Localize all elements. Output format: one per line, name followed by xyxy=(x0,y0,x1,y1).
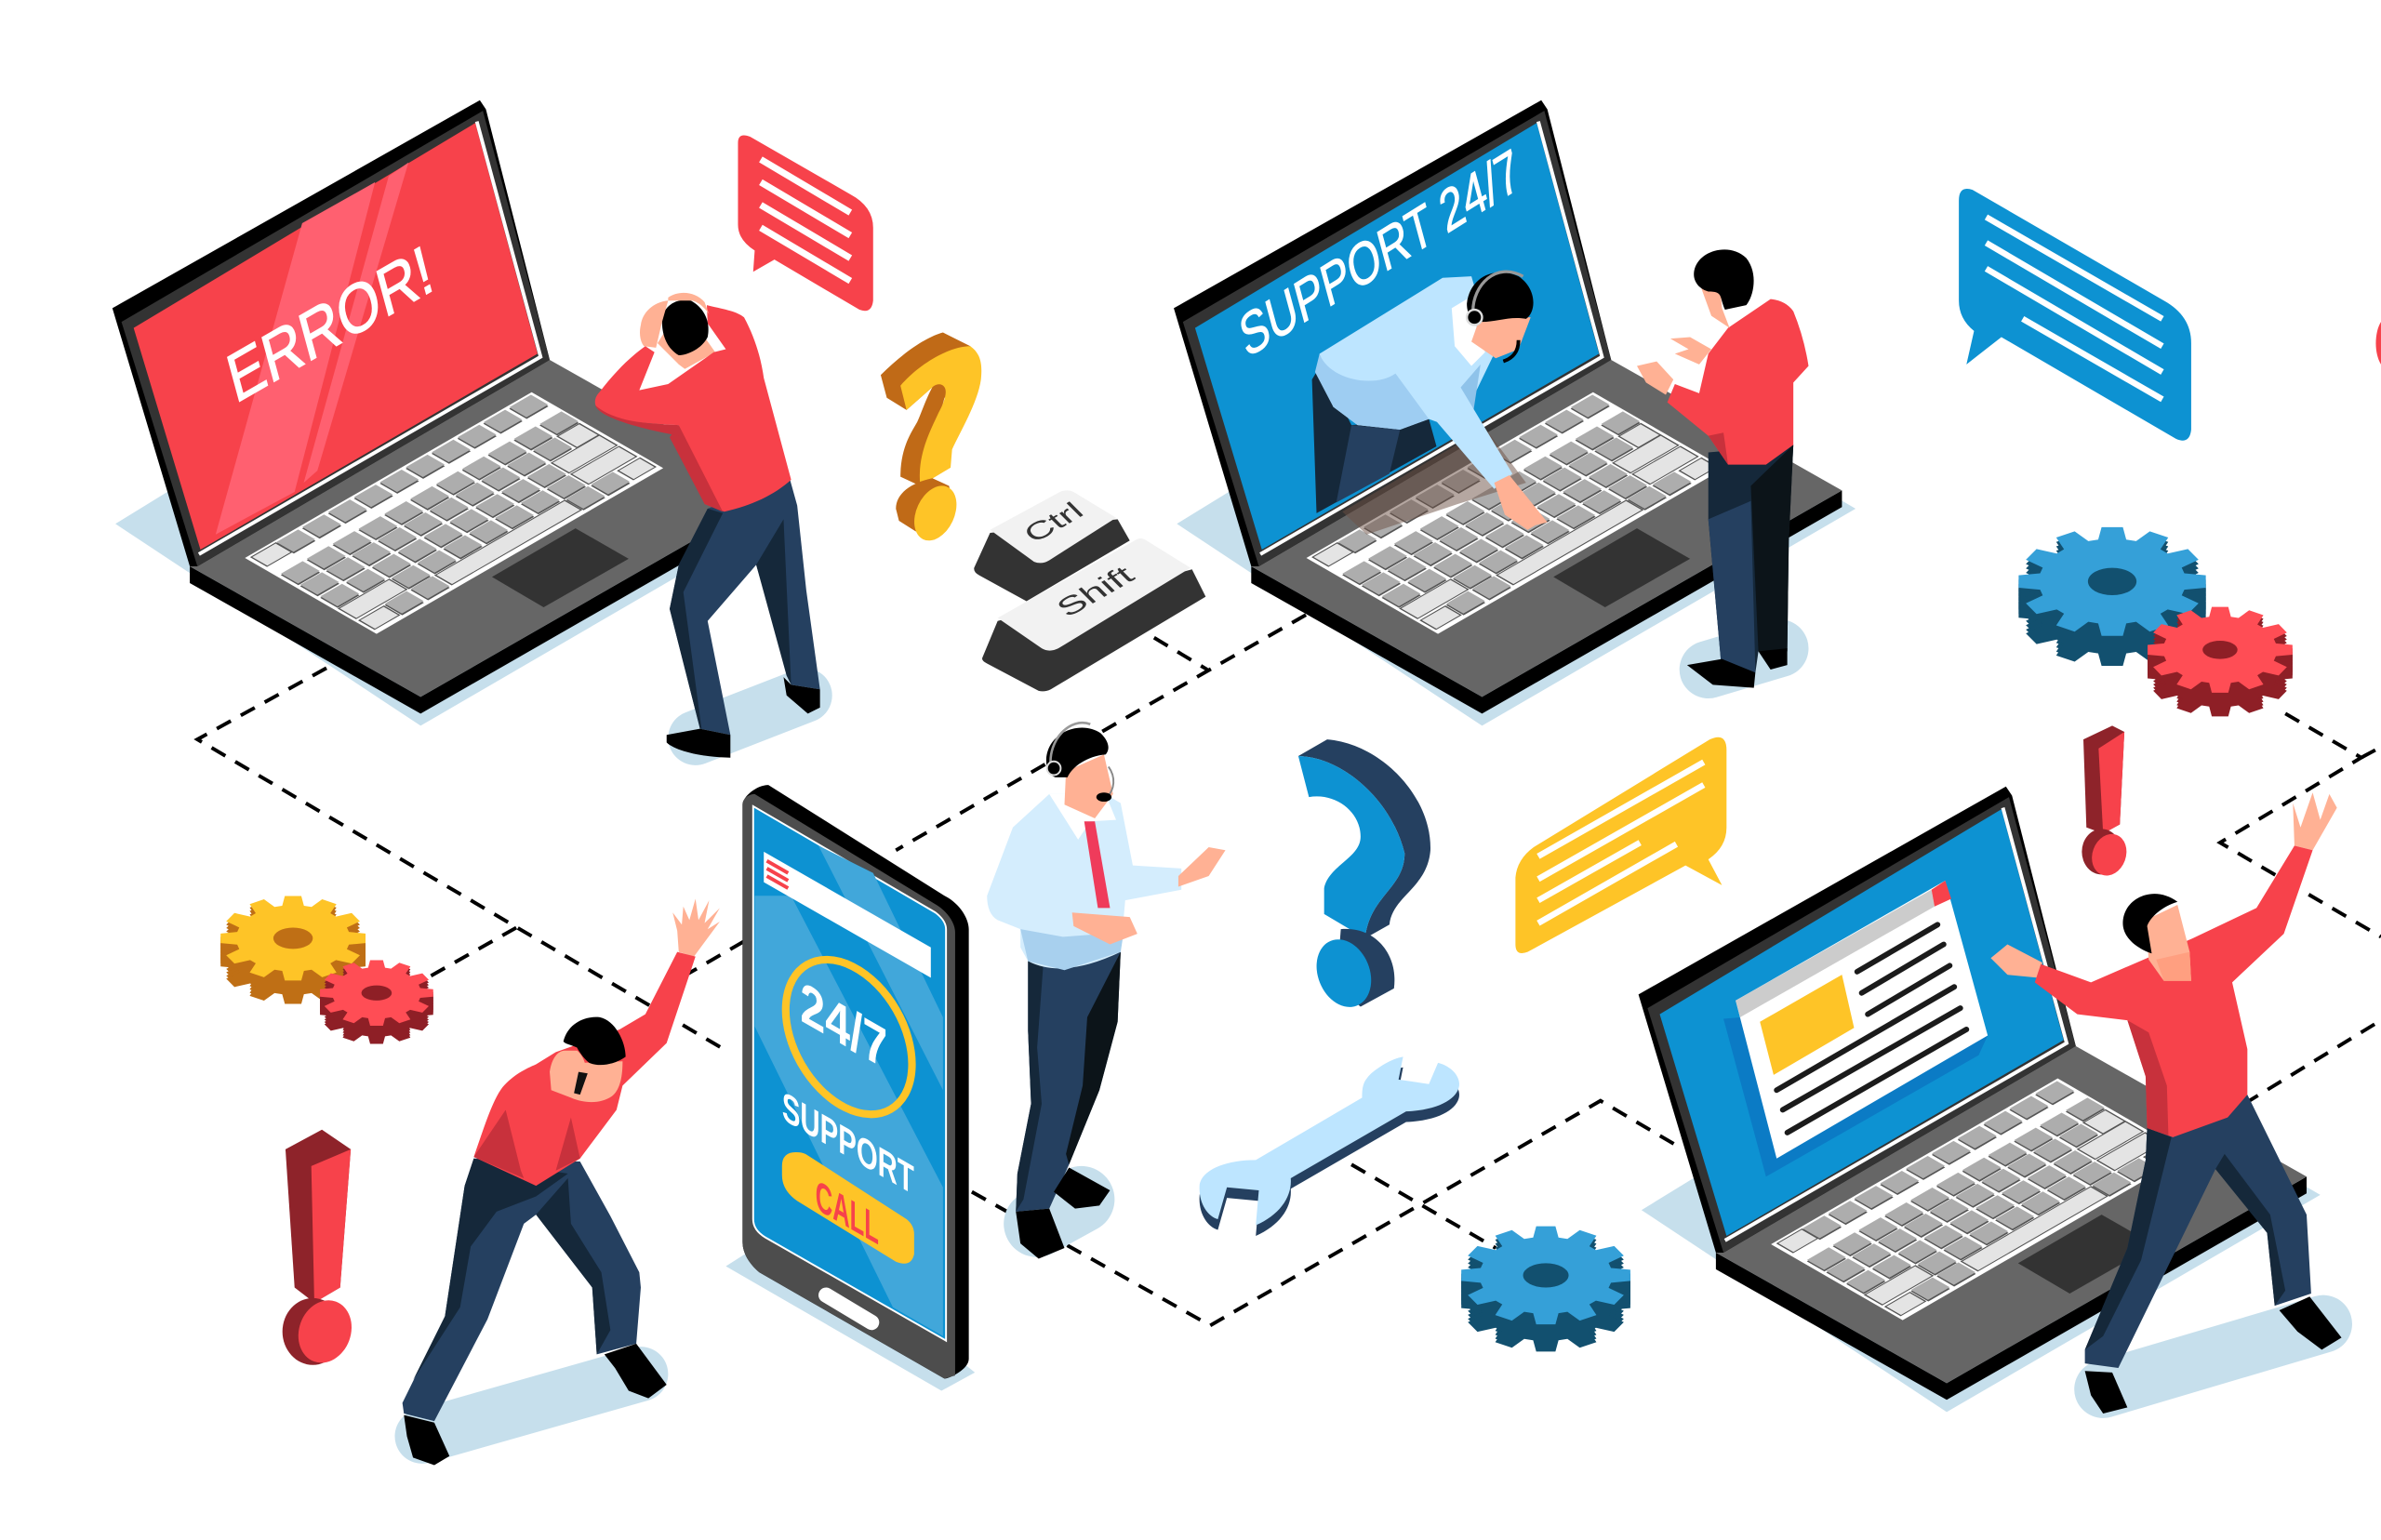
trousers xyxy=(1016,952,1121,1212)
phone xyxy=(574,1072,588,1095)
blue gear xyxy=(2018,532,2206,666)
tie xyxy=(1084,821,1110,908)
exclamation mark: top right xyxy=(2082,725,2132,881)
dashed connector lines xyxy=(197,615,2381,1325)
exclamation mark: bottom left xyxy=(283,1130,360,1371)
hair xyxy=(1694,249,1754,310)
screen edge highlight xyxy=(1260,122,1602,554)
agent arm xyxy=(1395,308,1512,489)
agent trousers xyxy=(1312,365,1436,513)
keyboard key: Shift: Shift xyxy=(1050,561,1140,622)
person: support customer, back view xyxy=(1637,249,1808,688)
hair xyxy=(2122,894,2177,953)
error text: ERROR! xyxy=(219,232,440,418)
face and neck xyxy=(1699,283,1730,328)
trousers xyxy=(2085,1095,2311,1368)
hands xyxy=(1670,337,1711,365)
agent hair xyxy=(1467,272,1534,322)
smartphone with support app xyxy=(725,785,975,1391)
call text: CALL xyxy=(816,1171,879,1255)
ring text: 24/7 xyxy=(800,969,887,1083)
call button xyxy=(782,1152,914,1264)
phone body xyxy=(742,785,969,1378)
agent face xyxy=(1471,316,1531,358)
browser image xyxy=(1760,975,1854,1075)
browser title bar xyxy=(1736,890,1935,1017)
agent headset xyxy=(1473,272,1523,312)
speech bubble: yellow xyxy=(1515,737,1726,953)
shirt xyxy=(987,794,1181,968)
sweater xyxy=(1668,299,1808,465)
screen reflections xyxy=(216,163,408,535)
hands xyxy=(1990,945,2042,977)
screen stripes xyxy=(754,845,943,1336)
yellow ring xyxy=(760,937,938,1136)
speech bubble: blue xyxy=(1959,189,2191,441)
neck and face xyxy=(2146,905,2191,981)
browser window xyxy=(1736,881,1988,1159)
question mark dot xyxy=(1337,929,1394,1006)
trousers xyxy=(1709,445,1793,672)
phone screen xyxy=(753,806,946,1341)
agent collar xyxy=(1452,299,1485,365)
hair xyxy=(564,1017,626,1065)
yellow gear xyxy=(220,899,366,1004)
hair xyxy=(662,300,709,355)
shoes xyxy=(2085,1371,2127,1414)
keyboard key: Shift xyxy=(982,538,1205,691)
laptop: error screen xyxy=(113,100,794,725)
agent shadow on keyboard xyxy=(1342,428,1526,535)
gear: blue large with red small xyxy=(2018,527,2293,716)
browser close button xyxy=(1932,881,1951,907)
person: red sweater worried, hands on head xyxy=(595,293,820,758)
speech bubble: red xyxy=(738,135,873,311)
collar xyxy=(1049,794,1116,840)
face xyxy=(571,1061,622,1102)
browser window shadow xyxy=(1723,1017,1988,1176)
sweater shading xyxy=(473,1109,524,1178)
floor shadow xyxy=(696,696,805,737)
shoes xyxy=(404,1415,449,1466)
question mark: blue xyxy=(1298,739,1430,1016)
sweater shading xyxy=(670,425,723,511)
shoes xyxy=(1016,1209,1064,1258)
face xyxy=(1064,754,1113,818)
floor shadow xyxy=(422,1374,641,1436)
trousers xyxy=(403,1159,641,1421)
hair xyxy=(1046,728,1109,777)
gears: yellow and red xyxy=(220,896,433,1043)
hand at ear xyxy=(550,1051,586,1097)
agent hand xyxy=(1495,475,1548,530)
floor shadow xyxy=(1709,648,1779,670)
hands xyxy=(640,300,668,348)
question mark dot xyxy=(896,478,953,531)
hands xyxy=(1178,847,1226,886)
person: support agent standing with headset xyxy=(987,723,1226,1258)
keyboard key: Ctrl xyxy=(974,490,1130,602)
shoes xyxy=(667,729,730,758)
neck and face xyxy=(658,326,715,369)
browser text lines xyxy=(1776,924,1966,1133)
sweater xyxy=(2035,845,2313,1137)
phone face xyxy=(742,794,955,1378)
laptop: support screen xyxy=(1174,100,1856,725)
person: red sweater bracing, raised arm xyxy=(403,899,720,1466)
screen edge highlight xyxy=(1725,808,2067,1241)
laptop: web page screen xyxy=(1639,787,2321,1412)
keyboard key: Ctrl: Ctrl xyxy=(1017,497,1090,548)
gear: blue bottom xyxy=(1461,1227,1630,1351)
floor shadow xyxy=(1037,1200,1081,1224)
question mark: orange xyxy=(881,333,981,548)
floor shadow xyxy=(2103,1324,2323,1389)
agent shirt xyxy=(1320,276,1495,432)
search bar xyxy=(764,852,931,977)
phone shadow xyxy=(725,1245,975,1391)
home button xyxy=(826,1295,871,1322)
sweater xyxy=(595,305,791,511)
red gear xyxy=(2148,610,2293,716)
error screen xyxy=(134,123,538,550)
support text: SUPPORT xyxy=(782,1082,914,1204)
small red gear xyxy=(320,962,433,1043)
blue screen xyxy=(1659,809,2064,1236)
support screen xyxy=(1195,123,1599,550)
menu icon xyxy=(766,861,788,888)
partial icon at right edge xyxy=(2375,322,2381,365)
sweater xyxy=(473,952,696,1186)
shoes xyxy=(1687,659,1755,688)
person: red sweater arms raised xyxy=(1990,792,2342,1414)
support text: SUPPORT 24/7 xyxy=(1233,137,1526,371)
support agent leaning out of the laptop xyxy=(1312,272,1548,535)
trousers xyxy=(670,478,820,735)
wrench xyxy=(1200,1056,1459,1236)
headset xyxy=(1051,723,1090,766)
raised hand xyxy=(672,899,720,957)
screen edge highlight xyxy=(199,122,540,554)
